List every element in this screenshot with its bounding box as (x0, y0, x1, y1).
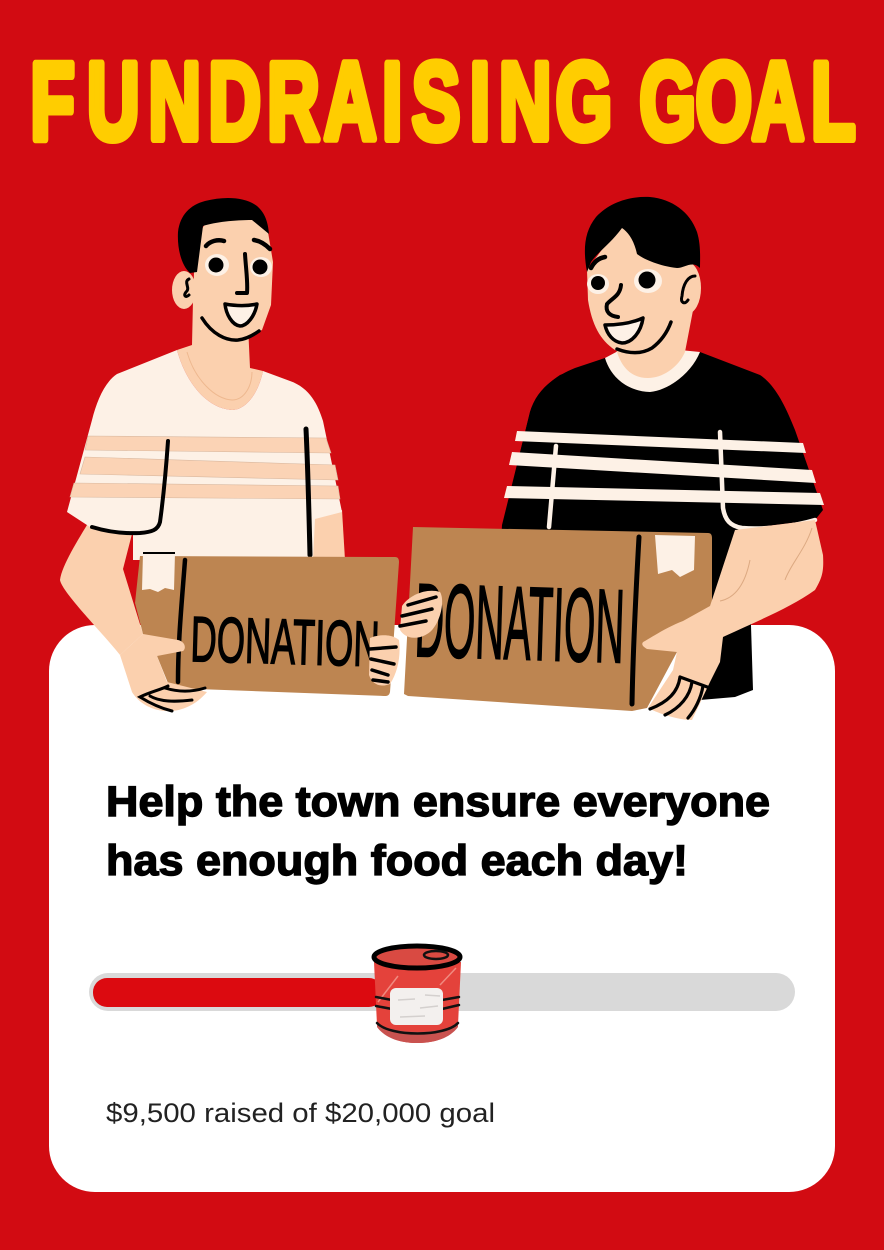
left man t-shirt (67, 350, 342, 560)
right man arm muscle lines (720, 528, 812, 601)
right man shirt seams (549, 432, 815, 529)
left man eyes (205, 254, 272, 277)
left man brows (206, 240, 270, 249)
left man jaw (202, 318, 259, 340)
right man mouth (605, 318, 643, 343)
headline (106, 778, 770, 885)
right man eyes (587, 269, 662, 294)
hands and right arm (120, 520, 823, 720)
left box body (135, 556, 399, 696)
left man fingers (140, 686, 205, 711)
illustration: man in cream shirt (60, 198, 345, 655)
right man jaw (617, 322, 671, 353)
right box tape (655, 535, 695, 577)
left box tape edge (143, 552, 175, 554)
progress bar (89, 973, 795, 1011)
right man neck and collar (605, 350, 700, 392)
right box seam (632, 537, 639, 704)
left box tape (142, 553, 175, 592)
left man far arm (312, 510, 345, 560)
left man neck (177, 300, 263, 410)
left man small hand (369, 635, 400, 686)
right man ear (673, 262, 701, 314)
icon: food can marker (374, 946, 461, 1043)
right man brow (591, 257, 605, 268)
can highlights (378, 968, 456, 1002)
left man shirt stripes (70, 436, 340, 499)
left man collar line (187, 352, 252, 400)
right man small hand (400, 591, 442, 638)
right man neck (612, 300, 695, 378)
right box label: DONATION (413, 561, 626, 685)
right man face (587, 225, 690, 355)
progress track (89, 973, 795, 1011)
right box body (404, 527, 712, 711)
headline: has enough food each day! (106, 837, 688, 885)
right man ear detail (682, 276, 695, 303)
left man face (193, 215, 273, 342)
right man t-shirt (502, 352, 823, 545)
left man mouth (225, 304, 257, 326)
can stripes (376, 997, 459, 1034)
can lower shade (377, 1022, 458, 1043)
white card panel (49, 625, 835, 1192)
headline: Help the town ensure everyone (106, 778, 770, 826)
right man hair (585, 197, 700, 272)
left man nose (237, 254, 247, 293)
left man hair (178, 198, 269, 273)
left man arm (60, 520, 143, 655)
left man head (172, 198, 273, 342)
illustration: man in black shirt (500, 197, 824, 700)
right man arm (642, 520, 823, 720)
can lid (374, 946, 460, 968)
left man shirt seams (92, 429, 310, 555)
left box label: DONATION (190, 603, 381, 680)
right man nose (607, 285, 621, 317)
right man shirt stripes (504, 431, 824, 505)
right man fingers (650, 677, 710, 718)
progress caption: $9,500 raised of $20,000 goal (106, 1098, 495, 1128)
can body (374, 962, 461, 1043)
left man ear detail (185, 279, 189, 296)
can label texture (398, 995, 440, 1017)
progress fill (93, 978, 383, 1007)
left man hand (120, 634, 207, 711)
can label (390, 988, 443, 1025)
left man ear (172, 271, 196, 309)
right man head (585, 197, 701, 355)
can pull tab (424, 951, 448, 959)
left box seam (178, 560, 185, 682)
title: FUNDRAISING GOAL (30, 40, 855, 163)
donation box: right (404, 527, 712, 711)
right man torso (500, 358, 753, 700)
donation box: left (135, 553, 399, 696)
